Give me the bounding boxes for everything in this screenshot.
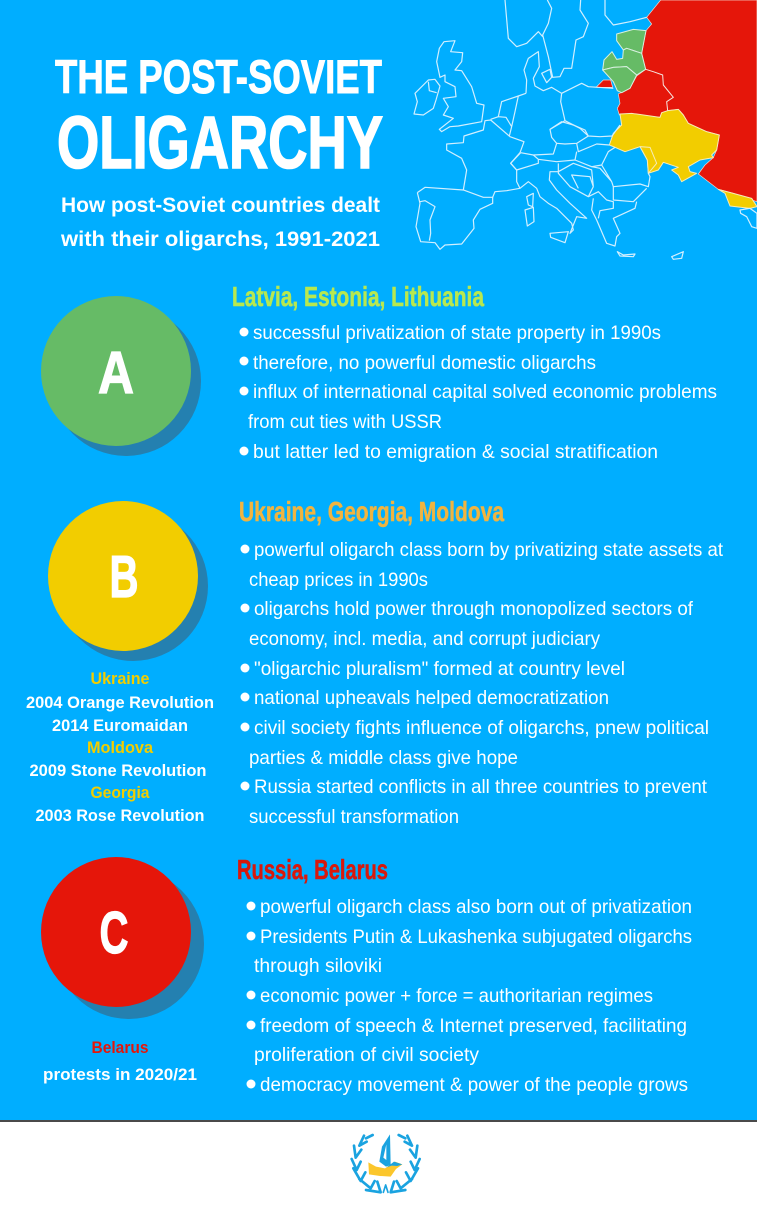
panel: group B <box>26 496 724 828</box>
text block: revolutions timeline: Moldova <box>87 739 154 757</box>
title: OLIGARCHY <box>57 101 383 184</box>
subtitle: with their oligarchs, 1991-2021 <box>60 227 380 251</box>
text block: group A bullets: from cut ties with USSR <box>248 411 442 433</box>
text block: group C bullets: proliferation of civil society <box>254 1044 479 1066</box>
text block: group B bullets: civil society fights influence of oligarchs, pnew political <box>254 717 709 739</box>
text block: group B bullets: cheap prices in 1990s <box>249 569 428 591</box>
text block: group C bullets: economic power + force = authoritarian regimes <box>260 985 653 1007</box>
text block: Belarus protests: protests in 2020/21 <box>43 1066 197 1084</box>
subtitle <box>60 193 380 251</box>
map: other country borders <box>414 0 757 259</box>
text block: group B bullets: parties & middle class give hope <box>249 747 518 769</box>
text block: revolutions timeline: Georgia <box>90 784 150 802</box>
text block: group B bullets: "oligarchic pluralism" formed at country level <box>254 658 625 680</box>
text block: group C bullets: freedom of speech & Internet preserved, facilitating <box>260 1015 687 1037</box>
circle badge B: B <box>110 544 138 610</box>
text block: group B bullets <box>240 539 724 828</box>
icon: yellow dove <box>368 1162 402 1177</box>
text block: group B bullets: powerful oligarch class born by privatizing state assets at <box>254 539 724 561</box>
subtitle: How post-Soviet countries dealt <box>61 193 380 217</box>
icon: blue sail <box>379 1134 391 1167</box>
text block: group C bullets: Presidents Putin & Lukashenka subjugated oligarchs <box>260 926 692 948</box>
heading: Ukraine, Georgia, Moldova: Ukraine, Georgia, Moldova <box>239 496 504 527</box>
icon: dove and wreath logo <box>352 1134 420 1192</box>
text block: group A bullets: influx of international capital solved economic problems <box>253 381 717 403</box>
map of Europe <box>414 0 757 259</box>
text block: group B bullets: Russia started conflicts in all three countries to prevent <box>254 776 708 798</box>
circle badge C <box>41 857 204 1019</box>
text block: revolutions timeline: 2014 Euromaidan <box>52 717 188 735</box>
heading: Latvia, Estonia, Lithuania: Latvia, Estonia, Lithuania <box>232 281 484 312</box>
text block: revolutions timeline: 2009 Stone Revolution <box>30 762 206 780</box>
text block: group A bullets: but latter led to emigration & social stratification <box>253 441 658 463</box>
text block: group B bullets: oligarchs hold power through monopolized sectors of <box>254 598 694 620</box>
panel: group A <box>41 281 717 463</box>
map: Baltic states in green <box>603 29 646 93</box>
circle badge C: C <box>100 900 128 966</box>
text block: group C bullets <box>246 896 692 1096</box>
text block: group C bullets: democracy movement & power of the people grows <box>260 1074 688 1096</box>
title <box>55 50 383 184</box>
text block: group B bullets: national upheavals helped democratization <box>254 687 609 709</box>
text block: revolutions timeline: Ukraine <box>90 670 150 688</box>
icon: wreath <box>352 1135 420 1192</box>
text block: group A bullets <box>240 322 717 463</box>
circle badge A <box>41 296 201 456</box>
circle badge A: A <box>98 340 134 406</box>
map: Russia and Belarus in red <box>596 0 757 202</box>
text block: Belarus protests: Belarus <box>92 1039 148 1057</box>
heading: Russia, Belarus: Russia, Belarus <box>237 854 388 885</box>
text block: group B bullets: successful transformation <box>249 806 459 828</box>
circle badge B <box>48 501 208 661</box>
text block: group C bullets: through siloviki <box>254 955 382 977</box>
text block: group B bullets: economy, incl. media, and corrupt judiciary <box>249 628 600 650</box>
map: Ukraine, Moldova and Georgia in yellow <box>609 109 757 208</box>
footer band <box>0 1120 757 1205</box>
text block: group C bullets: powerful oligarch class also born out of privatization <box>260 896 692 918</box>
text block: group A bullets: therefore, no powerful domestic oligarchs <box>253 352 596 374</box>
text block: group A bullets: successful privatization of state property in 1990s <box>253 322 661 344</box>
text block: Belarus protests <box>43 1039 197 1084</box>
panel: group C <box>41 854 692 1096</box>
text block: revolutions timeline: 2003 Rose Revolution <box>36 807 204 825</box>
text block: revolutions timeline <box>26 670 214 825</box>
text block: revolutions timeline: 2004 Orange Revolution <box>26 694 214 712</box>
title: THE POST-SOVIET <box>55 50 382 103</box>
